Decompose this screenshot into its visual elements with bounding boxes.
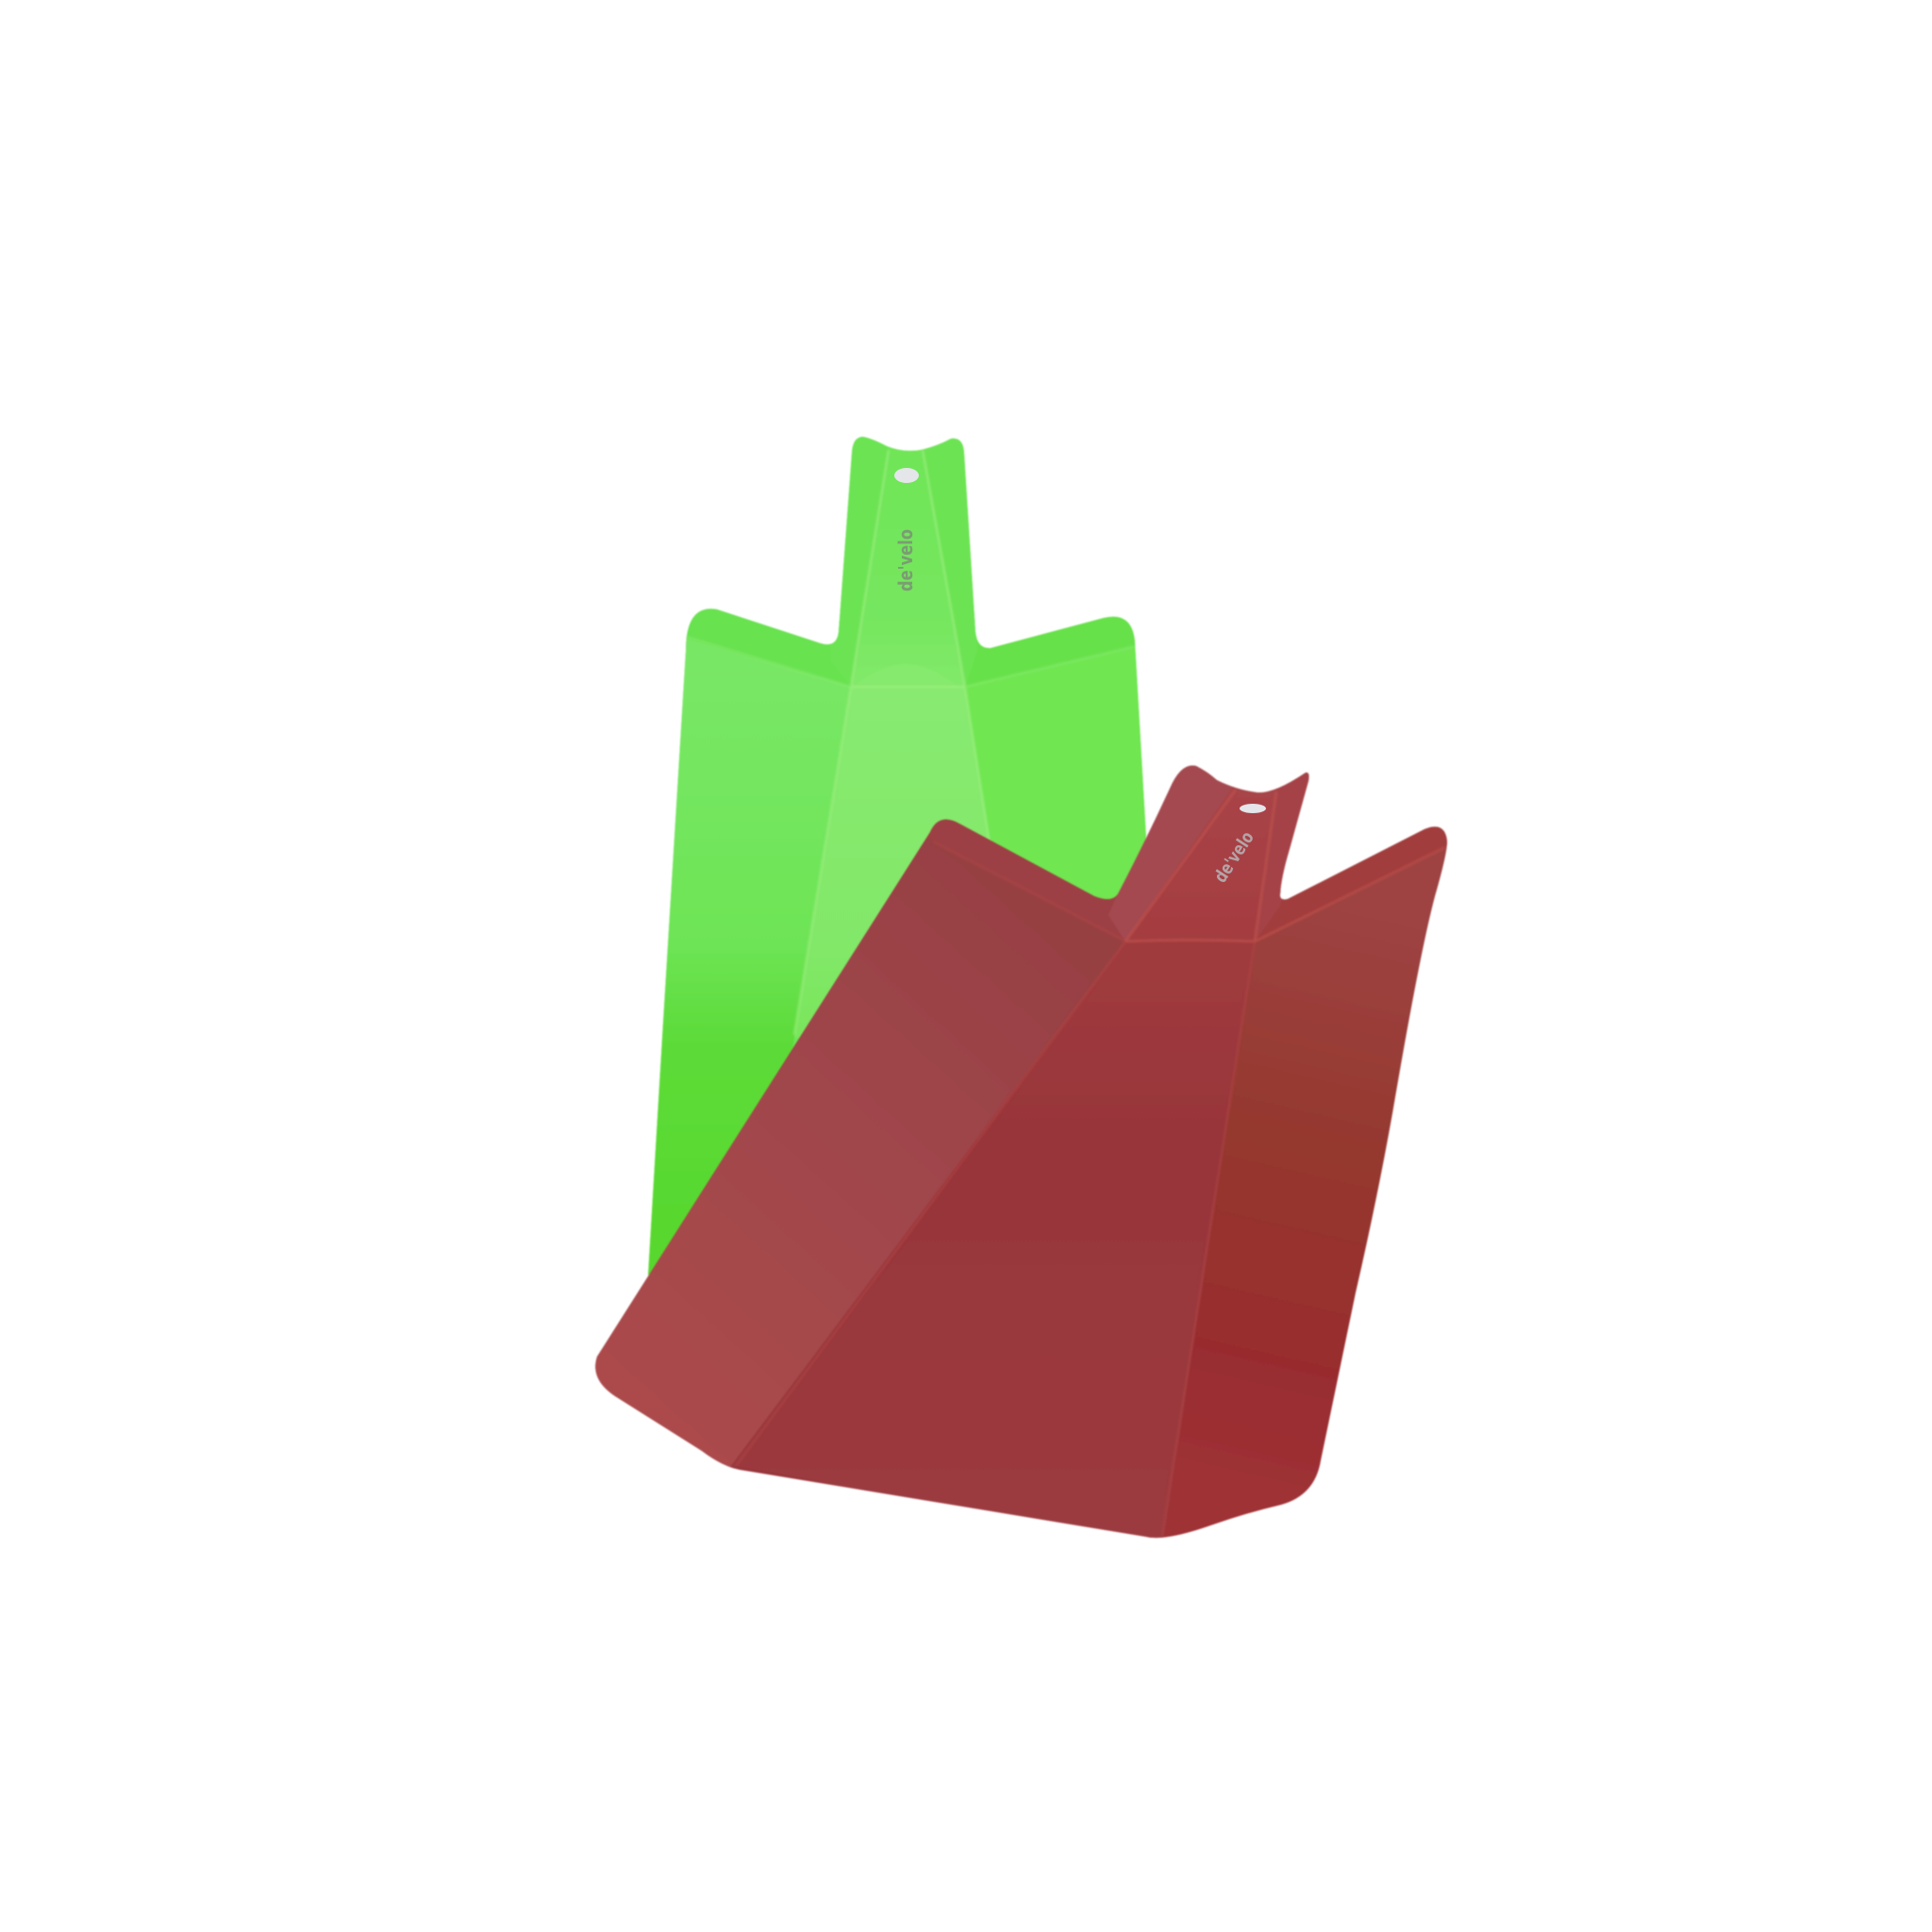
green board: handle centre <box>851 443 965 687</box>
green cutting board <box>641 429 1156 1321</box>
red cutting board <box>585 755 1462 1557</box>
red board: hanging hole <box>1240 804 1266 813</box>
green board: left panel <box>647 640 849 1275</box>
red board: base <box>585 755 1462 1557</box>
red board: brand mark: de'velo <box>1210 827 1258 887</box>
red board: left arm flap <box>944 821 1122 938</box>
green board: right panel <box>1134 651 1147 836</box>
green board: brand mark: de'velo <box>894 529 917 591</box>
red board: centre panel <box>698 941 1255 1547</box>
green board: base <box>641 434 1151 1283</box>
green board: hanging hole <box>894 468 919 483</box>
green board: handle left side <box>840 436 887 618</box>
red board: right panel <box>1162 844 1453 1547</box>
red board: handle centre <box>1125 783 1276 941</box>
green board: centre panel <box>794 687 989 1038</box>
red board: handle left side <box>1109 766 1232 940</box>
product photo: two folding cutting boards <box>594 436 1449 1540</box>
green board: lighter fold arc <box>854 664 958 687</box>
green board: handle right side <box>924 438 976 677</box>
green board: left arm flap <box>687 608 831 664</box>
red board: right arm flap <box>1258 826 1447 938</box>
red board: handle right side <box>1257 774 1308 937</box>
red board: left panel <box>585 811 1125 1491</box>
green board: right arm flap <box>967 616 1136 685</box>
